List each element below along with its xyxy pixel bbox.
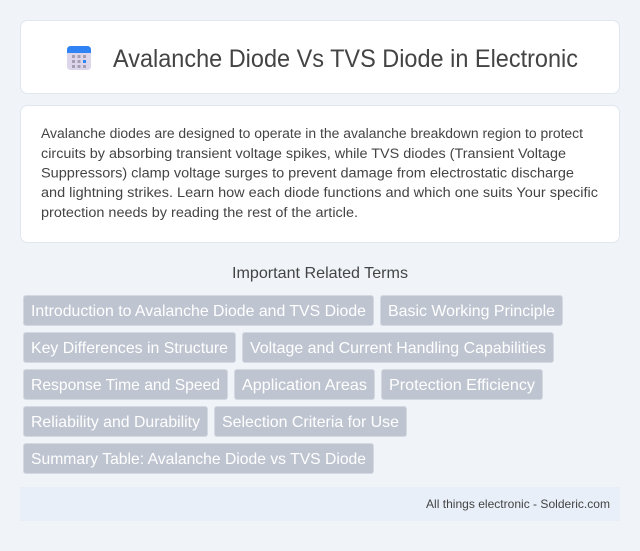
tag: Application Areas xyxy=(242,377,367,394)
tag: Reliability and Durability xyxy=(31,414,200,431)
footer xyxy=(20,487,620,521)
tag: Key Differences in Structure xyxy=(31,340,228,357)
text block: description: Avalanche diodes are designed to operate in the avalanche breakdown region to protect xyxy=(41,126,583,142)
text block: description xyxy=(41,126,598,221)
tag: Summary Table: Avalanche Diode vs TVS Diode xyxy=(31,451,366,468)
tag xyxy=(24,332,236,362)
text block: description: Suppressors) clamp voltage surges to prevent damage from electrostatic discharge xyxy=(41,166,574,182)
tag xyxy=(382,370,542,400)
tag: Voltage and Current Handling Capabilities xyxy=(250,340,546,357)
text block: description: circuits by absorbing transient voltage spikes, while TVS diodes (Transient Voltage xyxy=(41,146,566,162)
tag xyxy=(24,406,208,436)
tag xyxy=(24,444,374,474)
tag xyxy=(242,332,554,362)
tag list xyxy=(24,296,562,474)
tag xyxy=(380,296,562,326)
tag xyxy=(24,370,228,400)
tag: Introduction to Avalanche Diode and TVS Diode xyxy=(31,303,366,320)
tag: Response Time and Speed xyxy=(31,377,220,394)
tag: Basic Working Principle xyxy=(388,303,555,320)
panel: introduction text xyxy=(20,106,620,242)
footer credit: All things electronic - Solderic.com xyxy=(426,497,610,511)
tag xyxy=(24,296,374,326)
tag: Protection Efficiency xyxy=(389,377,535,394)
tag xyxy=(234,370,374,400)
tag: Selection Criteria for Use xyxy=(222,414,399,431)
text block: description: and lightning strikes. Learn how each diode functions and which one suits Your specific xyxy=(41,185,598,201)
title: Avalanche Diode Vs TVS Diode in Electronic xyxy=(113,45,578,73)
tag xyxy=(214,406,406,436)
panel: title header xyxy=(20,20,620,94)
heading: related terms: Important Related Terms xyxy=(232,265,408,282)
text block: description: protection needs by reading the rest of the article. xyxy=(41,205,358,221)
icon: calendar grid xyxy=(67,46,91,70)
